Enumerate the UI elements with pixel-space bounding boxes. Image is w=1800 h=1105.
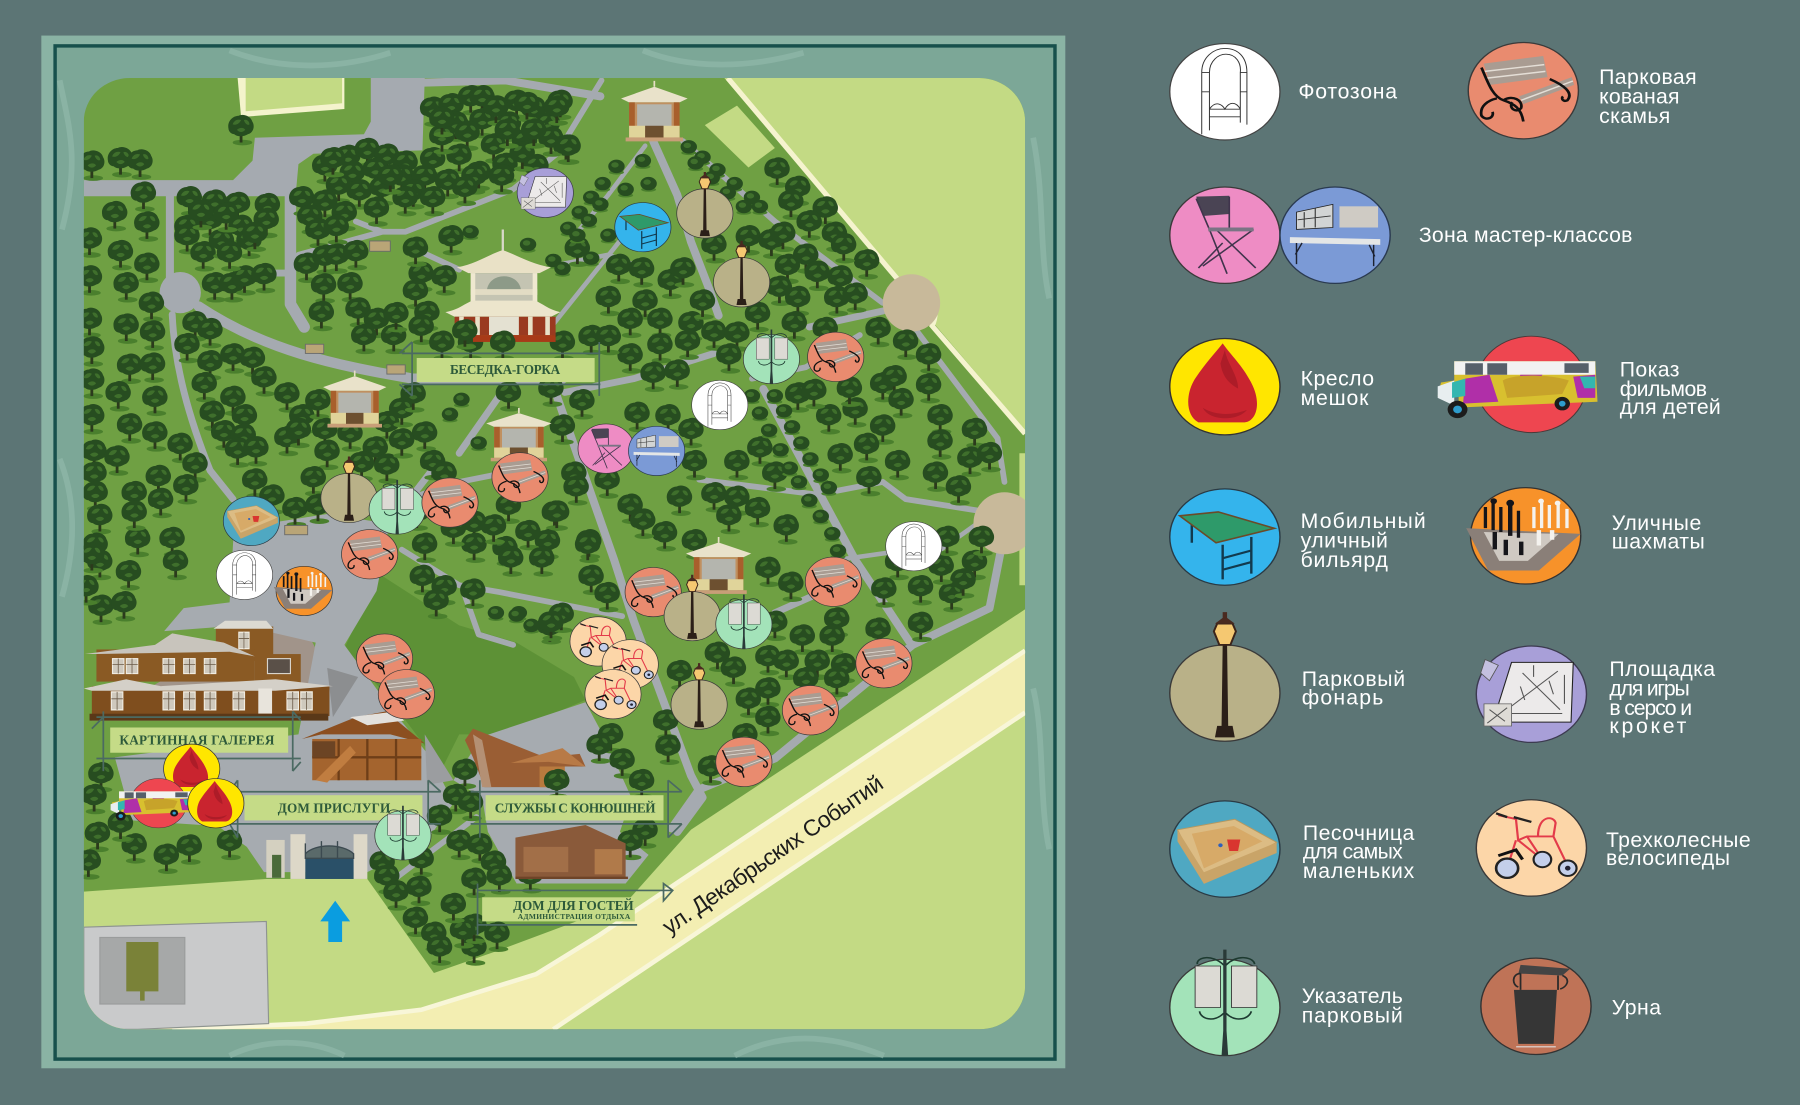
path hub [160, 272, 201, 313]
label: беседка-горка: БЕСЕДКА-ГОРКА [450, 362, 561, 377]
legend: указатель парковый: Указатель [1302, 985, 1403, 1008]
north-east plaza circle [883, 274, 940, 332]
ornamental frame [41, 36, 1065, 1068]
map markers [111, 168, 942, 860]
marker: photo zone [692, 380, 748, 430]
label: дом для гостей [478, 884, 673, 935]
building: беседка-горка [445, 229, 560, 361]
legend: парковая кованая скамья: Парковая [1599, 66, 1697, 89]
marker: sign [743, 330, 800, 384]
legend: парковый фонарь [1170, 612, 1405, 741]
marker: sign [375, 806, 431, 860]
legend: парковый фонарь: Парковый [1302, 668, 1405, 691]
marker: bench [342, 530, 398, 579]
top-left lawn court [238, 78, 344, 117]
monument plinth [100, 937, 185, 1004]
building: small gazebo south [686, 537, 751, 594]
legend: показ фильмов для детей: Показ [1620, 358, 1679, 381]
marker: bench [856, 639, 912, 688]
legend: парковая кованая скамья: кованая [1599, 85, 1679, 108]
legend: кресло мешок: Кресло [1301, 368, 1374, 391]
label: дом для гостей: ДОМ ДЛЯ ГОСТЕЙ [513, 898, 634, 913]
legend [1170, 42, 1751, 1056]
small lawn patch [705, 106, 775, 168]
marker: bench [782, 686, 839, 735]
right edge strip [1019, 453, 1025, 585]
label: картинная галерея: КАРТИННАЯ ГАЛЕРЕЯ [119, 733, 275, 748]
building: small gazebo north [621, 81, 688, 141]
legend: площадка для игры в серсо и крокет: Площадка [1609, 658, 1715, 681]
legend: площадка для игры в серсо и крокет: для игры [1609, 677, 1690, 700]
marker: bean bag [188, 779, 244, 828]
legend: площадка для игры в серсо и крокет: в серсо и [1609, 697, 1692, 720]
marker: bench [625, 567, 681, 617]
legend: мобильный уличный бильярд: Мобильный [1301, 510, 1426, 533]
marker: tricycle [570, 617, 626, 666]
marker: bench [716, 737, 772, 787]
legend: песочница для самых маленьких: маленьких [1303, 860, 1415, 883]
legend: парковая кованая скамья [1468, 42, 1697, 139]
legend: мобильный уличный бильярд: бильярд [1301, 549, 1388, 572]
north-east lawn [724, 78, 1025, 430]
marker: photo zone [216, 550, 273, 600]
north-east cream edge [728, 78, 1025, 434]
service yard [453, 702, 649, 884]
gallery tan ground [92, 632, 315, 721]
legend: кресло мешок: мешок [1301, 387, 1369, 410]
marker: bench [805, 557, 862, 606]
building: main gate [266, 834, 367, 879]
marker: bean bag [164, 744, 220, 793]
label: дом прислуги [230, 780, 441, 838]
east plaza semicircle [974, 492, 1026, 554]
park map panel [41, 36, 1065, 1068]
marker: lamp [664, 575, 720, 641]
map area [73, 78, 1035, 1029]
legend: песочница для самых маленьких [1170, 801, 1415, 897]
legend: показ фильмов для детей: фильмов [1620, 378, 1707, 401]
legend: уличные шахматы: шахматы [1612, 530, 1705, 553]
marker: film bus [111, 779, 192, 828]
south lawn strip [84, 609, 1025, 1029]
legend: указатель парковый [1170, 950, 1403, 1056]
monument [126, 942, 158, 1001]
marker: tricycle [602, 640, 658, 689]
marker: billiard [615, 203, 671, 252]
legend: уличные шахматы [1466, 488, 1705, 584]
building: small gazebo west [323, 371, 386, 428]
building: дом для гостей [515, 825, 628, 878]
legend: уличные шахматы: Уличные [1612, 512, 1701, 535]
legend: зона мастер-классов: Зона мастер-классов [1419, 224, 1632, 247]
legend: фотозона [1170, 44, 1397, 140]
legend: урна: Урна [1612, 996, 1661, 1019]
legend: указатель парковый: парковый [1302, 1004, 1403, 1027]
legend: песочница для самых маленьких: для самых [1303, 840, 1403, 863]
marker: sign [369, 480, 425, 534]
label: дом прислуги: ДОМ ПРИСЛУГИ [278, 800, 391, 815]
marker: photo zone [886, 522, 942, 571]
marker: bench [356, 634, 413, 683]
marker: sandbox [223, 496, 280, 546]
building: картинная галерея [84, 621, 358, 721]
park paths [84, 78, 1004, 878]
legend: кресло мешок [1170, 338, 1374, 435]
marker: bench [492, 453, 548, 502]
marker: bench [378, 670, 435, 719]
parking lot [84, 921, 269, 1029]
legend: показ фильмов для детей: для детей [1620, 396, 1721, 419]
building: службы с конюшней [465, 729, 585, 799]
legend: трехколесные велосипеды: велосипеды [1606, 847, 1730, 870]
legend: показ фильмов для детей [1438, 336, 1721, 433]
legend: урна [1481, 958, 1661, 1055]
marker: bench [808, 332, 864, 382]
legend: зона мастер-классов [1170, 187, 1632, 283]
marker: croquet ground [517, 168, 573, 217]
label: службы с конюшней [471, 780, 682, 838]
legend: площадка для игры в серсо и крокет: крокет [1609, 715, 1687, 738]
legend: площадка для игры в серсо и крокет [1476, 646, 1715, 742]
building: small gazebo center [486, 408, 552, 461]
marker: chair [578, 424, 634, 473]
park lawn base [84, 78, 1025, 1029]
legend: трехколесные велосипеды: Трехколесные [1606, 829, 1751, 852]
forest dark wedge [344, 574, 585, 769]
label: дом для гостей: АДМИНИСТРАЦИЯ ОТДЫХА [518, 912, 631, 921]
marker: chess [274, 566, 332, 616]
legend: мобильный уличный бильярд: уличный [1301, 529, 1388, 552]
marker: bench [422, 478, 478, 527]
street name: ул. Декабрьских Событий [657, 770, 888, 939]
gallery plaza [115, 505, 453, 872]
small park benches [285, 241, 405, 535]
entrance arrow [320, 901, 350, 942]
road: ул. Декабрьских Событий [138, 651, 1025, 1029]
legend: парковый фонарь: фонарь [1302, 687, 1383, 710]
marker: lamp [671, 663, 727, 729]
label: службы с конюшней: СЛУЖБЫ С КОНЮШНЕЙ [495, 800, 656, 815]
label: картинная галерея [92, 711, 301, 771]
marker: lamp [677, 172, 733, 238]
marker: lamp [713, 241, 770, 307]
marker: tricycle [585, 670, 641, 719]
trees [73, 85, 1002, 966]
marker: sign [716, 595, 772, 649]
building: дом прислуги [302, 711, 453, 785]
marker: lamp [321, 457, 377, 523]
label: беседка-горка [399, 342, 600, 396]
legend: парковая кованая скамья: скамья [1599, 105, 1670, 128]
marker: table [629, 426, 685, 476]
legend: песочница для самых маленьких: Песочница [1303, 822, 1414, 845]
legend: трехколесные велосипеды [1476, 800, 1751, 896]
legend: фотозона: Фотозона [1298, 81, 1397, 104]
legend: мобильный уличный бильярд [1170, 489, 1426, 585]
